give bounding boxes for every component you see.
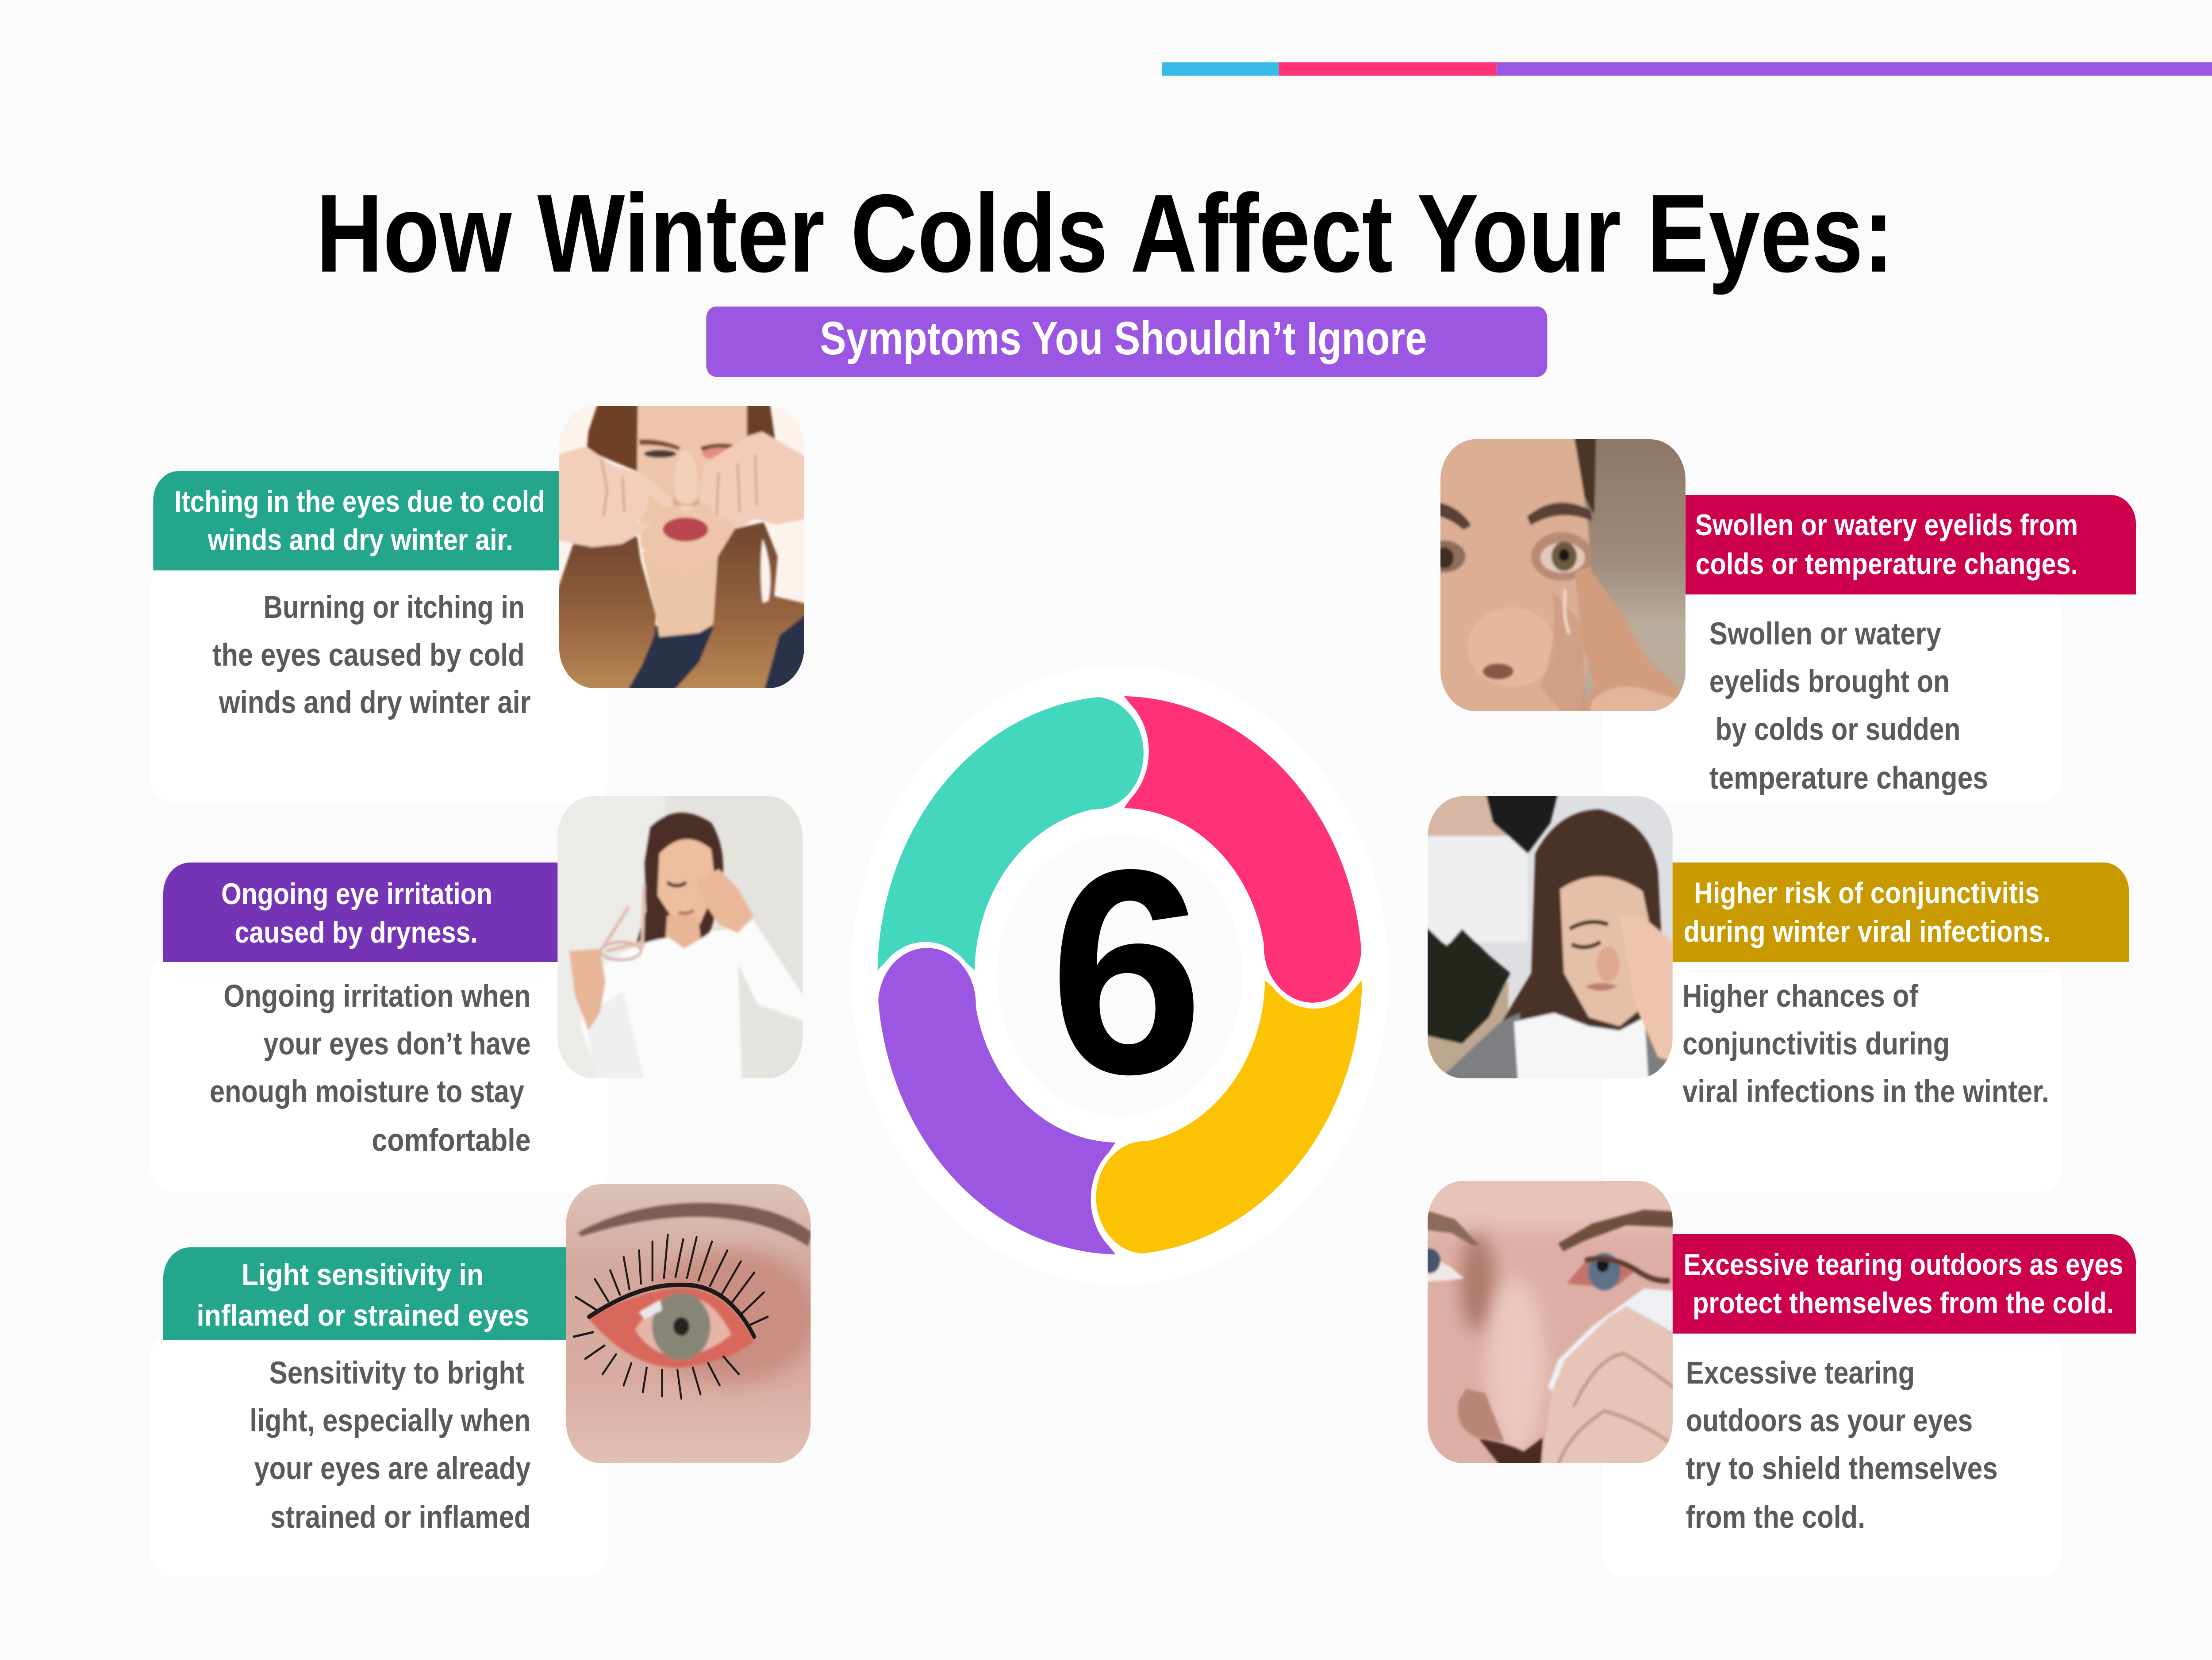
body text: light, especially when	[250, 1403, 531, 1438]
photo: red inflamed eye	[566, 1184, 819, 1463]
body text	[250, 1356, 531, 1535]
subtitle banner	[706, 307, 1547, 377]
photo: teary eye close-up	[1423, 430, 1686, 722]
card background	[150, 562, 609, 802]
heading banner: inflamed or strained eyes	[196, 1299, 529, 1332]
body text: enough moisture to stay	[210, 1074, 524, 1109]
body text	[1682, 979, 2049, 1109]
body text: Sensitivity to bright	[269, 1356, 525, 1391]
panel: light sensitivity	[150, 1184, 819, 1577]
heading banner	[153, 471, 559, 571]
heading banner: Light sensitivity in	[242, 1258, 484, 1292]
subtitle banner: Symptoms You Shouldn’t Ignore	[820, 312, 1427, 364]
card background	[1602, 588, 2062, 803]
heading banner: Excessive tearing outdoors as eyes	[1684, 1248, 2123, 1281]
photo: woman with plant holding eye	[1420, 787, 1674, 1084]
heading banner: caused by dryness.	[234, 916, 478, 949]
photo: woman in white sweater	[550, 787, 805, 1088]
top accent bar	[1162, 62, 2212, 76]
panel: excessive tearing	[1412, 1163, 2136, 1577]
heading banner: protect themselves from the cold.	[1693, 1286, 2114, 1320]
heading banner	[163, 1247, 566, 1340]
body text: comfortable	[372, 1123, 531, 1158]
body text	[1686, 1356, 1998, 1535]
heading banner	[1672, 863, 2129, 962]
panel: conjunctivitis risk	[1420, 787, 2129, 1192]
body text: winds and dry winter air	[219, 685, 531, 720]
body text: outdoors as your eyes	[1686, 1403, 1973, 1438]
card background	[1602, 1334, 2062, 1577]
card background	[1602, 955, 2062, 1192]
heading banner: Itching in the eyes due to cold	[174, 485, 545, 518]
body text: Excessive tearing	[1686, 1356, 1915, 1391]
ring segment: purple	[878, 948, 1116, 1254]
heading banner: Swollen or watery eyelids from	[1695, 508, 2078, 542]
card background	[150, 1334, 609, 1577]
body text	[212, 590, 531, 720]
panel: ongoing irritation	[150, 787, 805, 1192]
body text: eyelids brought on	[1709, 664, 1950, 699]
heading banner	[1686, 495, 2136, 594]
title: How Winter Colds Affect Your Eyes:	[316, 171, 1894, 295]
body text: the eyes caused by cold	[212, 638, 525, 673]
panel: itching	[150, 402, 807, 802]
heading banner: Ongoing eye irritation	[221, 877, 492, 911]
body text: try to shield themselves	[1686, 1451, 1998, 1486]
central ring diagram	[851, 666, 1389, 1285]
center number: 6	[1049, 809, 1203, 1135]
body text: Higher chances of	[1682, 979, 1919, 1014]
heading banner: Higher risk of conjunctivitis	[1694, 876, 2039, 910]
card background	[150, 955, 609, 1192]
photo: nose and tissue close-up	[1412, 1163, 1689, 1466]
body text: Burning or itching in	[263, 590, 525, 625]
body text: from the cold.	[1686, 1500, 1865, 1535]
body text: Ongoing irritation when	[223, 979, 531, 1014]
body text: by colds or sudden	[1716, 712, 1960, 747]
body text: your eyes don’t have	[263, 1027, 531, 1062]
heading banner: during winter viral infections.	[1684, 915, 2051, 948]
ring segment: pink	[1124, 696, 1361, 1003]
ring segment: yellow	[1096, 980, 1362, 1254]
heading banner: colds or temperature changes.	[1695, 547, 2078, 581]
heading banner: winds and dry winter air.	[207, 523, 513, 556]
body text: temperature changes	[1709, 761, 1988, 796]
body text	[210, 979, 531, 1158]
body text	[1709, 617, 1988, 796]
heading banner	[163, 863, 557, 962]
panel: swollen eyelids	[1423, 430, 2136, 803]
body text: viral infections in the winter.	[1682, 1074, 2049, 1109]
photo: woman rubbing eyes	[555, 402, 807, 691]
body text: Swollen or watery	[1709, 617, 1941, 652]
body text: strained or inflamed	[270, 1500, 531, 1535]
body text: your eyes are already	[254, 1451, 531, 1486]
heading banner	[1672, 1234, 2136, 1334]
ring segment: teal	[878, 697, 1144, 970]
body text: conjunctivitis during	[1682, 1027, 1950, 1062]
